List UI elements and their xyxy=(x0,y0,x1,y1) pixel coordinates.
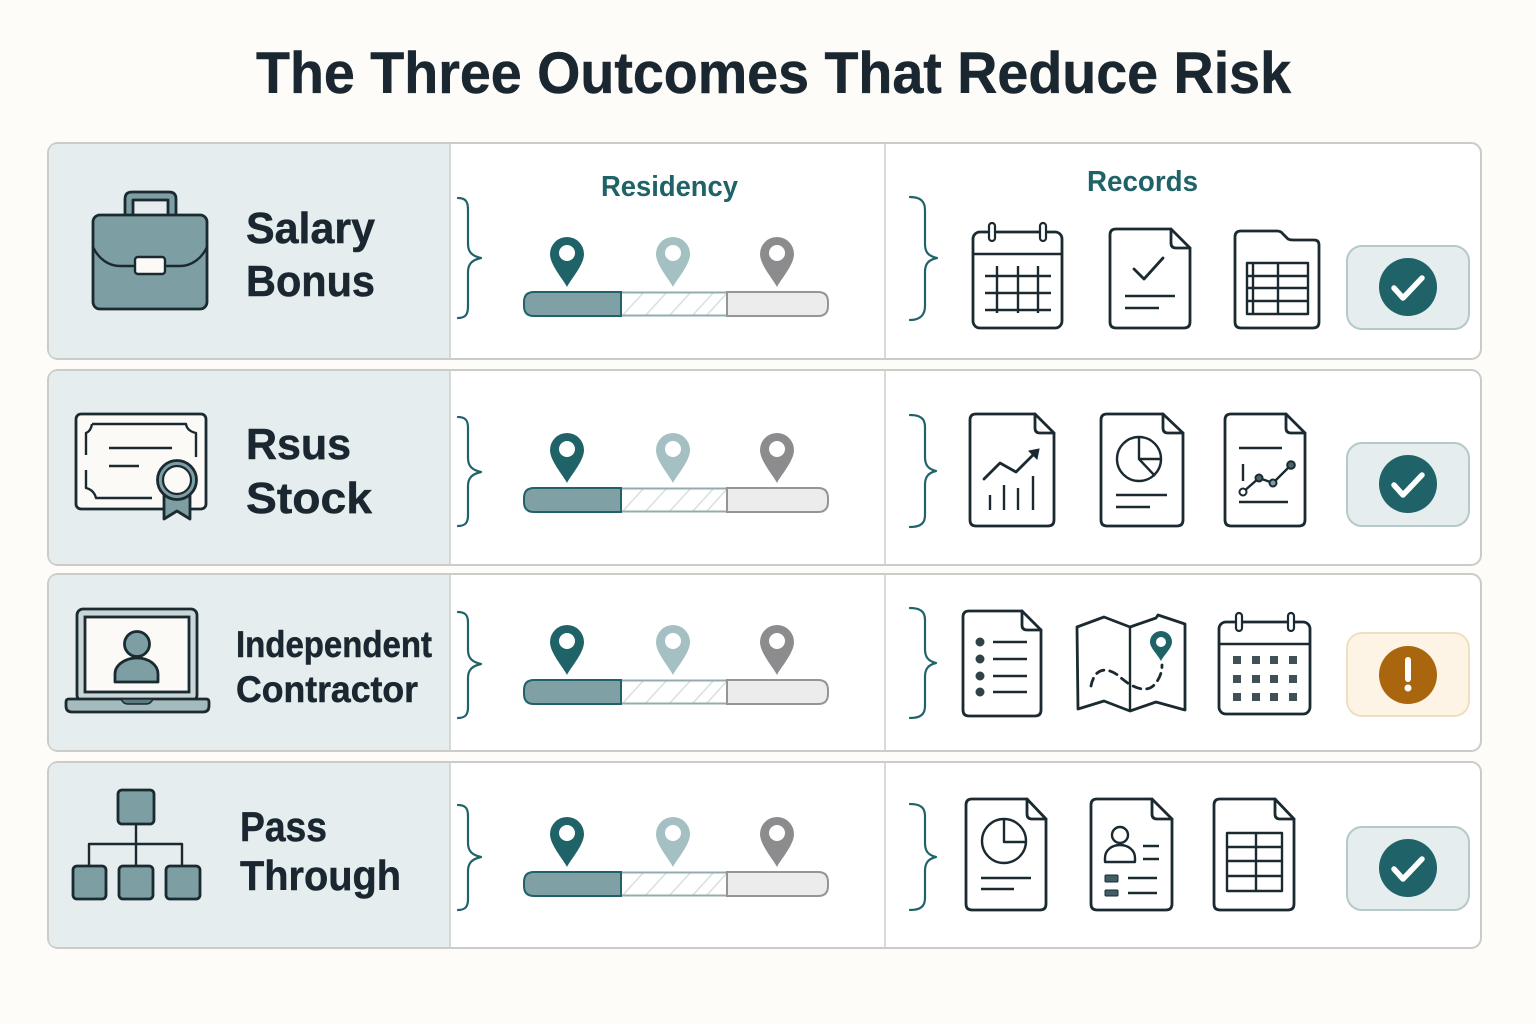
panel: row Independent Contractor xyxy=(48,574,1481,751)
row label: Pass Through: Pass xyxy=(240,803,327,850)
bracket: records xyxy=(910,608,936,718)
icon: dotted calendar xyxy=(1219,613,1310,714)
residency pins and bar xyxy=(524,817,828,896)
row label: Pass Through: Through xyxy=(240,852,401,899)
icon: checked document xyxy=(1110,229,1190,328)
status badge: check xyxy=(1347,443,1469,526)
residency pins and bar xyxy=(524,237,828,316)
status badge: check xyxy=(1347,827,1469,910)
row label: Rsus Stock: Rsus xyxy=(246,420,351,469)
residency pins and bar xyxy=(524,625,828,704)
panel: row Pass Through xyxy=(48,762,1481,948)
row label: Rsus Stock xyxy=(246,420,373,523)
row label: Pass Through xyxy=(240,803,401,899)
icon: folder with table xyxy=(1235,231,1319,328)
icon: certificate xyxy=(76,414,206,519)
panel: row Rsus Stock xyxy=(48,370,1481,565)
icon: pie chart document xyxy=(1101,414,1183,526)
residency pins and bar xyxy=(524,433,828,512)
row label: Independent Contractor: Contractor xyxy=(236,669,418,710)
title: The Three Outcomes That Reduce Risk xyxy=(256,41,1292,106)
panel: row Salary Bonus xyxy=(48,143,1481,359)
icon: route map xyxy=(1077,615,1185,711)
icon: growth chart document xyxy=(970,414,1054,526)
icon: org chart xyxy=(73,790,200,899)
icon: table document xyxy=(1214,799,1294,910)
icon: profile document xyxy=(1091,799,1172,910)
icon: checklist document xyxy=(963,611,1041,716)
heading: Residency: Residency xyxy=(601,171,738,203)
bracket: residency xyxy=(458,198,481,318)
row label: Independent Contractor: Independent xyxy=(236,624,432,665)
bracket: records xyxy=(910,415,936,527)
heading: Records: Records xyxy=(1087,166,1198,198)
bracket: records xyxy=(910,804,936,910)
icon: laptop with person xyxy=(66,609,209,712)
row label: Rsus Stock: Stock xyxy=(246,474,373,523)
row label: Independent Contractor xyxy=(236,624,432,710)
status badge: warning xyxy=(1347,633,1469,716)
bracket: residency xyxy=(458,612,481,718)
row label: Salary Bonus xyxy=(246,204,376,306)
bracket: residency xyxy=(458,805,481,910)
icon: grid calendar xyxy=(973,223,1062,328)
status badge: check xyxy=(1347,246,1469,329)
bracket: records xyxy=(910,197,937,320)
icon: line chart document xyxy=(1225,414,1305,526)
icon: briefcase xyxy=(93,192,207,309)
icon: pie report document xyxy=(966,799,1046,910)
row label: Salary Bonus: Bonus xyxy=(246,257,375,306)
bracket: residency xyxy=(458,417,481,526)
row label: Salary Bonus: Salary xyxy=(246,204,376,253)
